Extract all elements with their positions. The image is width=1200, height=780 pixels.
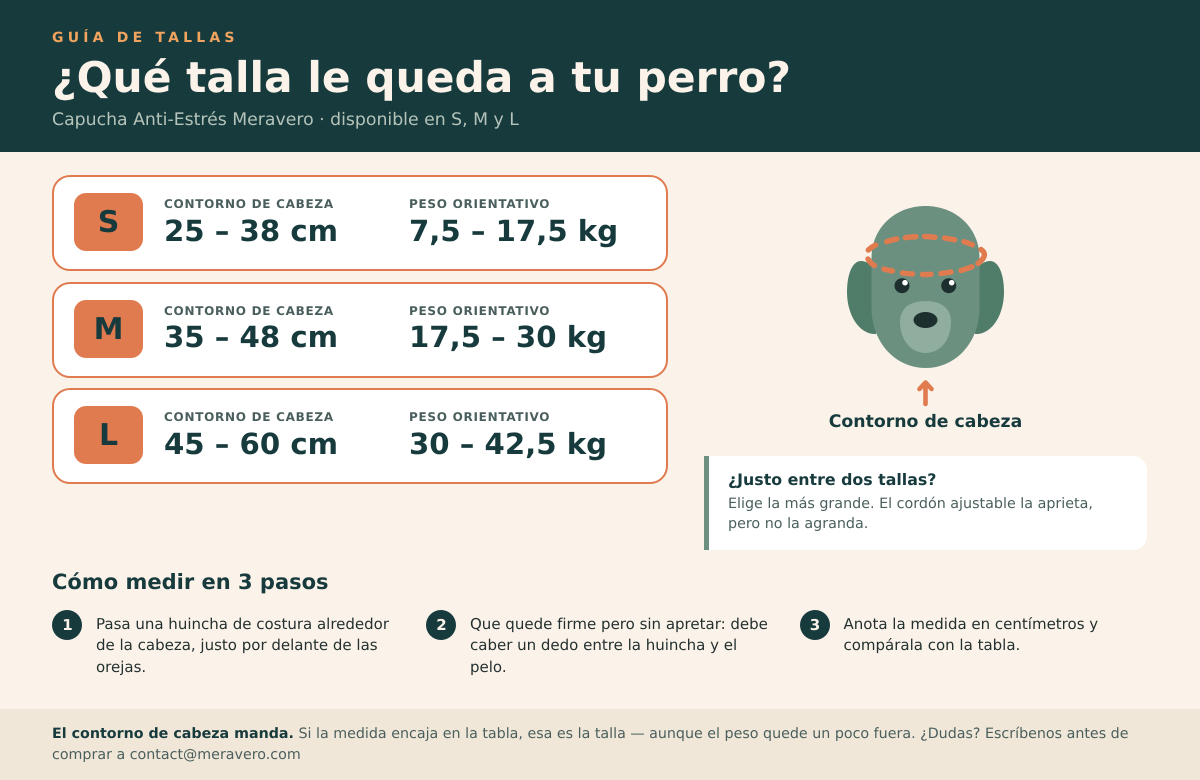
eyebrow: GUÍA DE TALLAS xyxy=(52,30,239,46)
step 2 xyxy=(426,610,768,676)
dog head diagram xyxy=(847,206,1004,406)
icon: nose xyxy=(914,312,938,328)
step text 2: pelo. xyxy=(470,658,507,676)
head measure M: CONTORNO DE CABEZA xyxy=(164,304,334,318)
header band xyxy=(0,0,1200,152)
weight value S: 7,5 – 17,5 kg xyxy=(409,214,618,248)
footer text: El contorno de cabeza manda. Si la medida encaja en la tabla, esa es la talla — aunque el peso quede un poco fuera. ¿Dudas? Escríbenos antes de xyxy=(52,726,1128,742)
subtitle: Capucha Anti-Estrés Meravero · disponible en S, M y L xyxy=(52,110,519,130)
weight value L: 30 – 42,5 kg xyxy=(409,426,607,460)
size card S xyxy=(52,175,668,271)
icon: muzzle xyxy=(900,301,951,353)
step text 3 xyxy=(844,615,1098,654)
step text 2: caber un dedo entre la huincha y el xyxy=(470,636,737,654)
step number 3: 3 xyxy=(810,616,820,634)
step 1 xyxy=(52,610,390,676)
measuring tape xyxy=(868,236,984,275)
icon: right ear xyxy=(975,261,1004,334)
step text 3: compárala con la tabla. xyxy=(844,636,1020,654)
badge M: M xyxy=(94,312,123,346)
callout xyxy=(704,456,1147,550)
size card M xyxy=(52,282,668,378)
head value S: 25 – 38 cm xyxy=(164,214,338,248)
step 3 xyxy=(800,610,1098,654)
footer text xyxy=(52,726,1128,763)
weight value M: 17,5 – 30 kg xyxy=(409,320,607,354)
step text 3: Anota la medida en centímetros y xyxy=(844,615,1098,633)
step number 3 xyxy=(800,610,830,640)
weight label S: PESO ORIENTATIVO xyxy=(409,197,550,211)
callout body: pero no la agranda. xyxy=(728,516,868,532)
step text 1 xyxy=(96,615,390,676)
badge S xyxy=(74,193,143,251)
diagram caption: Contorno de cabeza xyxy=(829,412,1022,432)
step text 2 xyxy=(470,615,768,676)
head value L: 45 – 60 cm xyxy=(164,426,338,460)
step text 2: Que quede firme pero sin apretar: debe xyxy=(470,615,768,633)
step text 1: de la cabeza, justo por delante de las xyxy=(96,636,378,654)
head measure S: CONTORNO DE CABEZA xyxy=(164,197,334,211)
badge S: S xyxy=(98,205,119,240)
callout body xyxy=(728,496,1093,532)
head measure L: CONTORNO DE CABEZA xyxy=(164,410,334,424)
footer band xyxy=(0,709,1200,780)
badge M xyxy=(74,300,143,358)
weight label L: PESO ORIENTATIVO xyxy=(409,410,550,424)
callout heading: ¿Justo entre dos tallas? xyxy=(728,470,936,489)
step text 1: Pasa una huincha de costura alrededor xyxy=(96,615,389,633)
badge L: L xyxy=(99,418,118,453)
arrow xyxy=(920,382,932,404)
size card L xyxy=(52,388,668,484)
step number 1 xyxy=(52,610,82,640)
steps heading: Cómo medir en 3 pasos xyxy=(52,570,329,594)
step text 1: orejas. xyxy=(96,658,146,676)
head value M: 35 – 48 cm xyxy=(164,320,338,354)
title: ¿Qué talla le queda a tu perro? xyxy=(52,53,791,102)
icon: left ear xyxy=(847,261,876,334)
icon: head xyxy=(872,206,980,368)
badge L xyxy=(74,406,143,464)
callout body: Elige la más grande. El cordón ajustable la aprieta, xyxy=(728,496,1093,512)
footer text: comprar a contact@meravero.com xyxy=(52,747,301,763)
icon: left eye xyxy=(894,278,910,293)
weight label M: PESO ORIENTATIVO xyxy=(409,304,550,318)
step number 2: 2 xyxy=(436,616,447,634)
icon: right eye xyxy=(941,278,956,293)
step number 2 xyxy=(426,610,456,640)
step number 1: 1 xyxy=(62,616,73,634)
